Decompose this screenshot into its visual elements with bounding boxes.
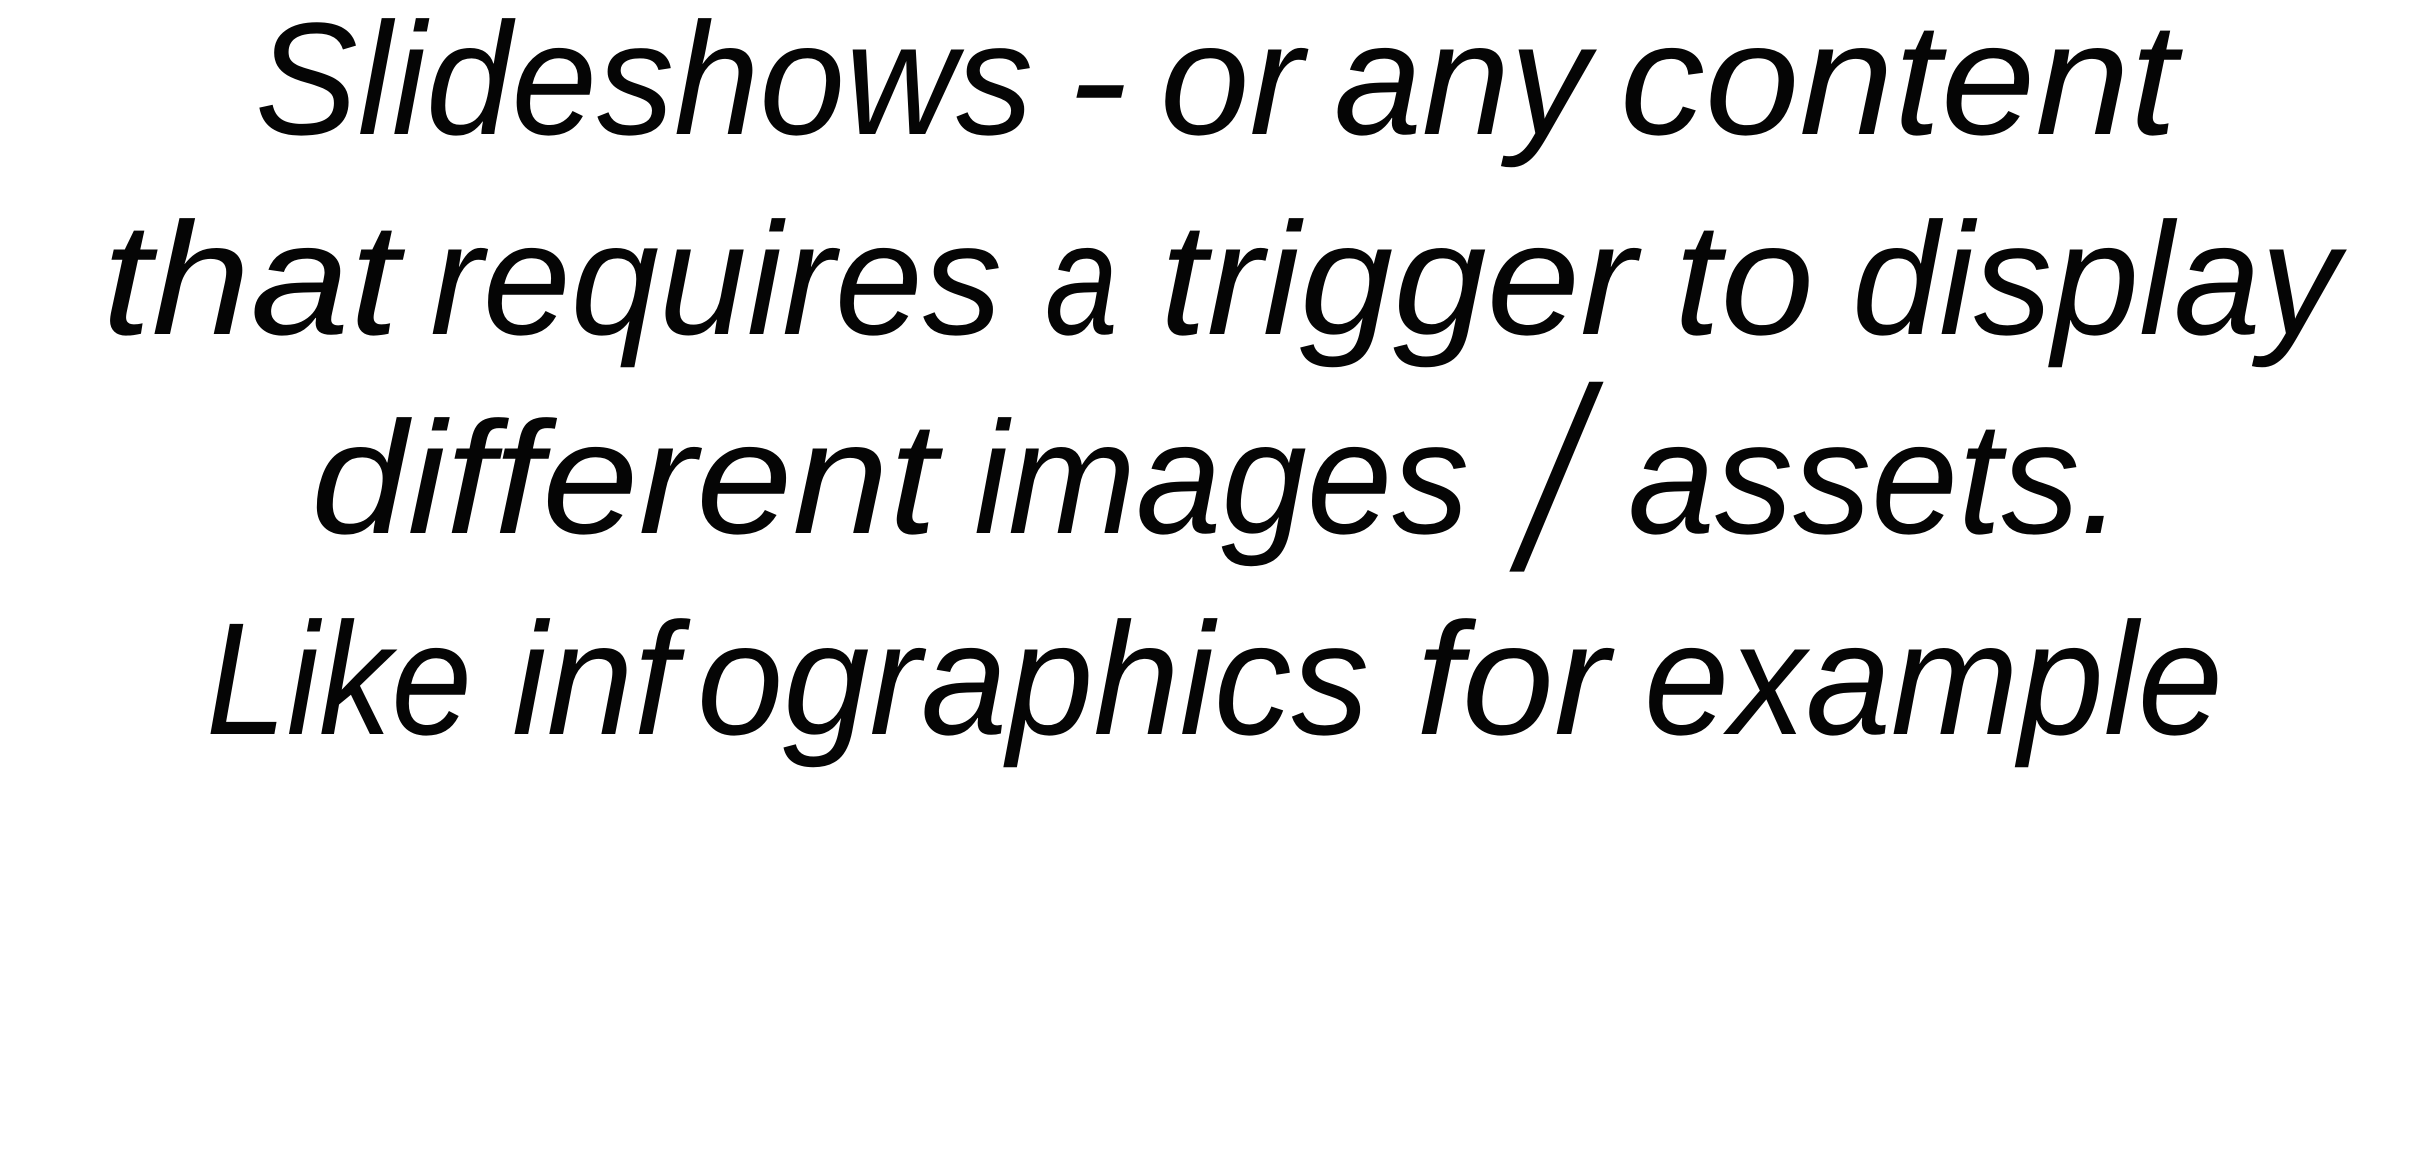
- line 2: to: [1674, 189, 1814, 368]
- line 3: images: [974, 388, 1469, 567]
- line 2: trigger: [1160, 189, 1642, 368]
- line 2: [102, 189, 2348, 368]
- line 3: different: [311, 388, 943, 567]
- line 3: [311, 332, 2123, 627]
- line 4: Like: [206, 589, 472, 768]
- line 3: /: [1505, 332, 1609, 627]
- line 4: example: [1644, 589, 2223, 768]
- line 4: inf: [512, 589, 691, 768]
- line 4: for: [1416, 589, 1615, 768]
- line 2: a: [1045, 189, 1118, 368]
- line 4: ographics: [697, 589, 1369, 768]
- line 3: assets.: [1628, 388, 2123, 567]
- line 4: [206, 589, 2223, 768]
- line 2: display: [1852, 189, 2348, 368]
- line 1: [255, 0, 2183, 168]
- line 2: that: [102, 189, 405, 368]
- line 2: requires: [430, 189, 1002, 368]
